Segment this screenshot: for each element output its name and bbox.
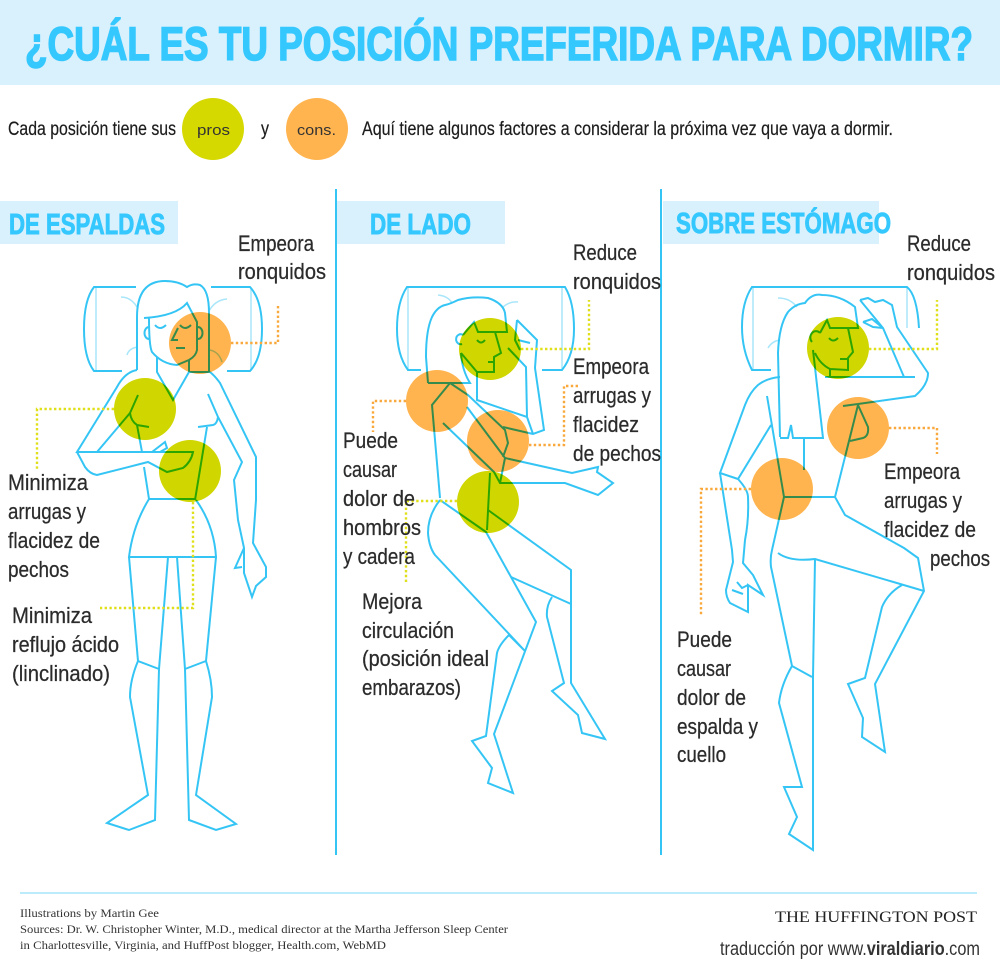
label: minimiza reflujo: reflujo ácido [12,632,119,657]
connector: ronquidos [869,300,937,349]
connector: ronquidos [231,305,278,343]
label: dolor de espalda: Puede [677,627,732,652]
label: dolor de hombros: Puede [343,428,398,453]
label: mejora circulacion [362,589,489,700]
publisher credit: THE HUFFINGTON POST [775,909,977,926]
figure: back sleeper [77,281,266,830]
footer credits [20,908,508,952]
label: dolor de espalda [677,627,758,767]
heading: sobre estomago: SOBRE ESTÓMAGO [676,206,891,240]
intro legend: y [261,119,269,140]
intro legend [8,98,893,160]
heading: de espaldas [0,201,178,244]
figure: stomach sleeper [720,287,928,850]
label: dolor de espalda: espalda y [677,714,758,739]
label: dolor de espalda: cuello [677,742,726,767]
marker: pro pechos [114,378,176,440]
label: minimiza reflujo: Minimiza [12,603,93,628]
label: reduce ronquidos [573,240,661,294]
label: empeora arrugas: Empeora [573,354,650,379]
marker: pro ronquidos [459,318,521,380]
label: empeora arrugas: pechos [930,546,990,571]
heading: de lado: DE LADO [370,209,471,241]
connector: espalda [701,489,751,616]
label: empeora arrugas: Empeora [884,459,961,484]
label: empeora arrugas: flacidez [573,412,639,437]
label: dolor de espalda: causar [677,656,731,681]
label: reduce ronquidos: Reduce [573,240,637,265]
pros badge [182,98,244,160]
label: minimiza arrugas: Minimiza [8,470,89,495]
label: empeora arrugas [573,354,661,466]
connector: pechos [529,386,580,445]
panel: de lado [337,201,661,793]
connector: pechos [889,428,937,454]
label: mejora circulacion: Mejora [362,589,423,614]
marker: pro circulacion [457,471,519,533]
connector: pechos [37,409,114,470]
label: minimiza arrugas: flacidez de [8,528,100,553]
label: empeora ronquidos [238,231,326,284]
figure: side sleeper [397,287,613,793]
marker: con pechos [827,397,889,459]
label: dolor de hombros: hombros [343,515,421,540]
label: reduce ronquidos: ronquidos [573,269,661,294]
cons badge [286,98,348,160]
label: mejora circulacion: embarazos) [362,675,461,700]
label: empeora ronquidos: Empeora [238,231,315,256]
marker: pro reflujo [159,440,221,502]
translation credit: traducción por www.viraldiario.com [720,939,980,960]
marker: con hombros [406,370,468,432]
label: mejora circulacion: circulación [362,618,454,643]
title banner [0,0,1000,85]
cons badge: cons. [297,122,336,139]
label: dolor de hombros: y cadera [343,544,416,569]
intro legend: Aquí tiene algunos factores a considerar la próxima vez que vaya a dormir. [362,119,893,140]
marker: con ronquidos [169,312,231,374]
label: empeora ronquidos: ronquidos [238,259,326,284]
footer credits: Sources: Dr. W. Christopher Winter, M.D., medical director at the Martha Jefferson Sleep Center [20,924,508,936]
label: mejora circulacion: (posición ideal [362,646,489,671]
label: minimiza arrugas: pechos [8,557,69,582]
label: minimiza reflujo: (linclinado) [12,661,110,686]
marker: pro ronquidos [807,317,869,379]
label: empeora arrugas: arrugas y [573,383,651,408]
connector: reflujo [100,502,193,608]
connector: hombros [373,401,406,432]
panel: sobre estomago [663,201,995,850]
footer credits: in Charlottesville, Virginia, and HuffPost blogger, Health.com, WebMD [20,940,386,952]
label: minimiza reflujo [12,603,119,686]
label: minimiza arrugas [8,470,100,582]
label: dolor de hombros: dolor de [343,486,415,511]
panel: de espaldas [0,201,326,830]
label: empeora arrugas: de pechos [573,441,661,466]
marker: con espalda [751,458,813,520]
label: empeora arrugas: flacidez de [884,517,976,542]
pros badge: pros [197,122,230,139]
marker: con pechos [467,410,529,472]
connector: circulacion [406,501,457,582]
heading: sobre estomago [663,201,891,244]
label: minimiza arrugas: arrugas y [8,499,86,524]
label: reduce ronquidos: Reduce [907,231,971,256]
label: empeora arrugas: arrugas y [884,488,962,513]
label: empeora arrugas [884,459,990,571]
label: dolor de espalda: dolor de [677,685,746,710]
label: reduce ronquidos [907,231,995,285]
heading: de espaldas: DE ESPALDAS [9,209,165,241]
label: dolor de hombros: causar [343,457,397,482]
intro legend: Cada posición tiene sus [8,119,176,140]
footer credits: Illustrations by Martin Gee [20,908,159,920]
heading: de lado [337,201,505,244]
connector: ronquidos [521,300,589,349]
label: dolor de hombros [343,428,421,569]
